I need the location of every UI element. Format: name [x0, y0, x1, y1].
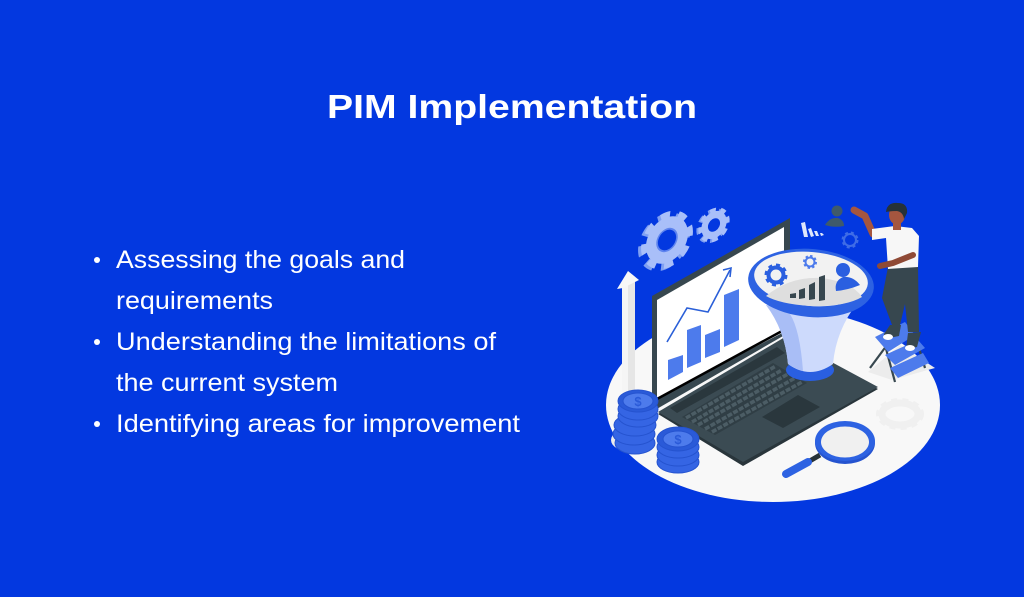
icon: large gear: [634, 210, 697, 272]
raised arm: [854, 210, 873, 234]
funnel icon: signal bars: [790, 275, 825, 301]
funnel icon: gear: [766, 265, 786, 285]
icon: gray person floating: [825, 206, 844, 227]
laptop base: [658, 337, 878, 466]
trend line arrow: [667, 270, 730, 342]
trousers: [882, 266, 919, 332]
laptop screen with chart: [652, 218, 790, 410]
title: PIM Implementation: [327, 88, 697, 125]
coin stack left: [611, 390, 658, 454]
icon: small bars floating: [801, 222, 824, 237]
icon: floating blue gear: [842, 232, 858, 248]
head: [886, 203, 907, 230]
coin stack left: $: [634, 394, 642, 409]
forearm: [880, 255, 913, 266]
bullet 1: [94, 246, 405, 315]
icon: small gear: [694, 207, 732, 244]
bullet 1: requirements: [116, 287, 273, 315]
funnel icon: person: [836, 263, 860, 291]
bullet 2: [94, 328, 496, 397]
illustration: PIM funnel on laptop: [606, 203, 940, 502]
funnel icon: small gear: [804, 256, 816, 268]
coin stack right: [657, 427, 699, 473]
stool: [868, 322, 935, 382]
icon: upward arrow: [617, 271, 639, 392]
bullet list: [94, 246, 520, 438]
bullet 3: Identifying areas for improvement: [116, 410, 520, 438]
shoes: [883, 325, 921, 351]
faint gear: [878, 400, 922, 428]
shirt: [872, 226, 919, 269]
coin stack right: $: [674, 432, 682, 447]
magnifying glass: [786, 421, 875, 474]
bullet 1: Assessing the goals and: [116, 246, 405, 274]
bullet 2: the current system: [116, 369, 338, 397]
bar chart: [668, 289, 739, 380]
person on stool: [854, 203, 935, 382]
bullet 2: Understanding the limitations of: [116, 328, 496, 356]
funnel: [745, 244, 877, 381]
platform ellipse: [606, 308, 940, 502]
